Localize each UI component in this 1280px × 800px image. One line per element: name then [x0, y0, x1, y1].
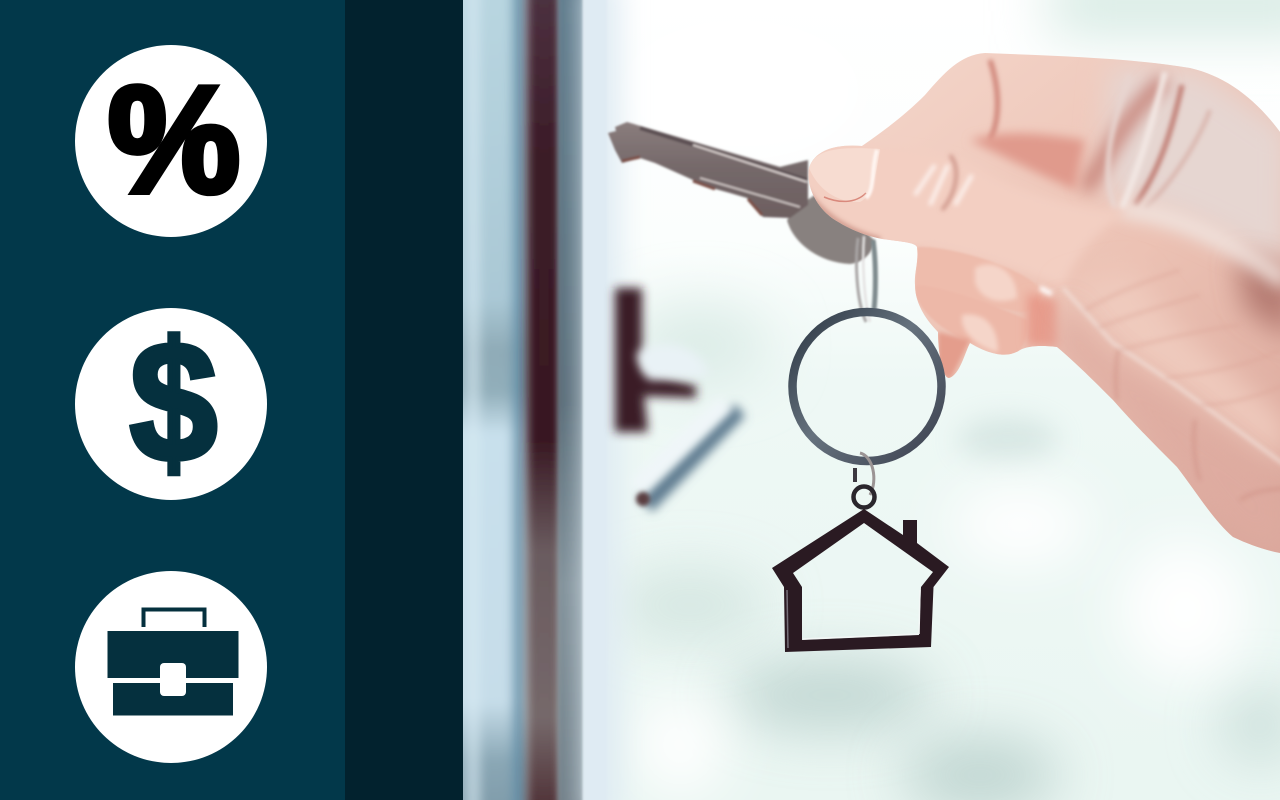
hand holding key	[805, 53, 1280, 553]
window glass strip	[455, 0, 530, 800]
key	[608, 122, 874, 264]
house charm	[772, 509, 949, 652]
upper connector ring	[857, 236, 875, 322]
lower connector	[854, 453, 874, 508]
icon: briefcase	[75, 571, 267, 763]
icon: dollar	[75, 306, 267, 500]
key bow	[787, 190, 874, 264]
pale window reveal	[583, 0, 620, 800]
photo: blurred window background	[455, 0, 1280, 800]
icon: percent	[75, 45, 267, 237]
dark window frame	[526, 0, 584, 800]
palm fold and creases	[1096, 285, 1280, 458]
back of hand shading	[1100, 66, 1280, 270]
blurred door handle	[615, 288, 745, 512]
icon: dollar: $	[130, 306, 217, 497]
thumb	[814, 197, 1108, 282]
large ring	[792, 312, 942, 461]
thumbnail	[809, 148, 880, 202]
fingers	[915, 247, 1042, 312]
left panel	[0, 0, 463, 800]
key ring and house keychain	[772, 236, 949, 652]
icon: percent: %	[108, 55, 240, 224]
key blade	[608, 122, 808, 218]
